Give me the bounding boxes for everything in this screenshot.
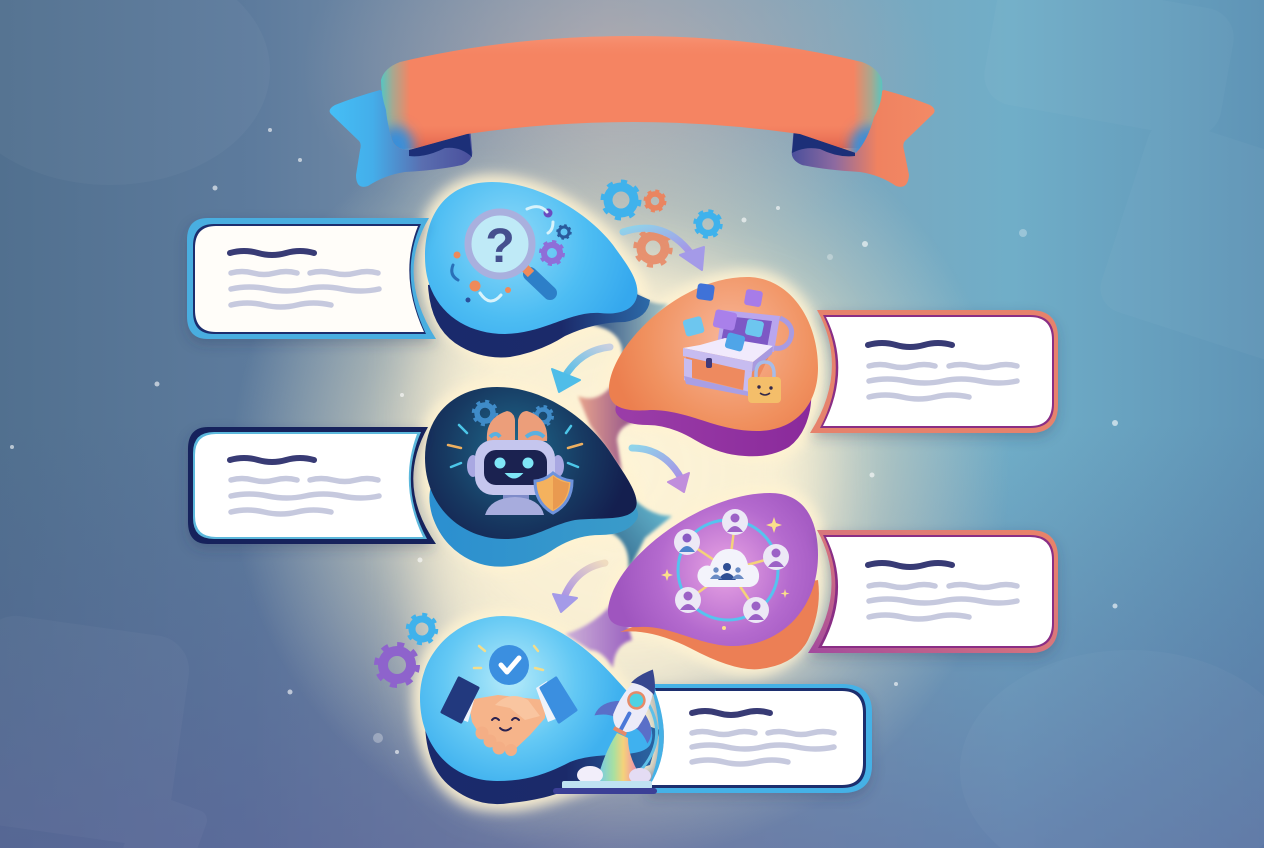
decorative dots xyxy=(452,207,553,302)
blob 2 xyxy=(609,277,818,456)
icon: magnifier with question mark: ? xyxy=(485,220,515,273)
floating cubes xyxy=(682,283,764,352)
icon: shield xyxy=(535,473,572,513)
card 5 xyxy=(645,684,872,793)
text placeholder lines xyxy=(230,458,379,514)
text placeholder lines xyxy=(868,343,1017,399)
connector blob 1 to 2 xyxy=(585,282,668,362)
icon: verified badge xyxy=(474,645,543,685)
gears lower left xyxy=(376,614,436,686)
connector blob 3 to 4 xyxy=(605,488,672,572)
icon: cloud network xyxy=(661,509,790,630)
icon: magnifier with question mark xyxy=(468,212,550,293)
gears cluster xyxy=(603,182,721,266)
lock icon xyxy=(748,362,781,403)
blob 3 xyxy=(425,387,638,567)
arrow blob 4 to 5 xyxy=(553,563,605,612)
card 2 xyxy=(810,310,1058,433)
icon: handshake xyxy=(442,678,576,756)
arrow blob 1 to 2 xyxy=(623,228,704,270)
blob 5 xyxy=(420,616,660,804)
card 3 xyxy=(188,427,436,544)
connector blob 4 to 5 xyxy=(565,595,632,668)
text placeholder lines xyxy=(868,563,1017,619)
central cream glow xyxy=(230,80,1010,848)
arrow blob 3 to 4 xyxy=(632,448,689,492)
right ribbon tail xyxy=(792,90,935,187)
left ribbon tail xyxy=(330,90,472,187)
ribbon folds xyxy=(409,131,472,157)
icon: robot head with brain xyxy=(448,402,582,515)
icon: gear small dark xyxy=(558,226,570,238)
icon: rocket launch xyxy=(553,655,680,794)
card 1 xyxy=(187,218,436,339)
text placeholder lines xyxy=(692,711,834,764)
blob 4 xyxy=(608,493,819,669)
cloud xyxy=(697,549,759,587)
cream halos around blobs xyxy=(420,182,818,804)
text placeholder lines xyxy=(230,251,379,307)
arrow blob 2 to 3 xyxy=(552,347,610,392)
card 4 xyxy=(808,530,1058,653)
connector blob 2 to 3 xyxy=(578,385,640,472)
ribbon body xyxy=(381,36,882,153)
title ribbon banner xyxy=(330,30,935,187)
icon: gear purple xyxy=(541,242,563,264)
icon: treasure chest xyxy=(682,283,792,403)
blob 1 xyxy=(425,182,650,357)
sparkle particles xyxy=(10,128,1118,754)
user nodes xyxy=(674,509,789,623)
